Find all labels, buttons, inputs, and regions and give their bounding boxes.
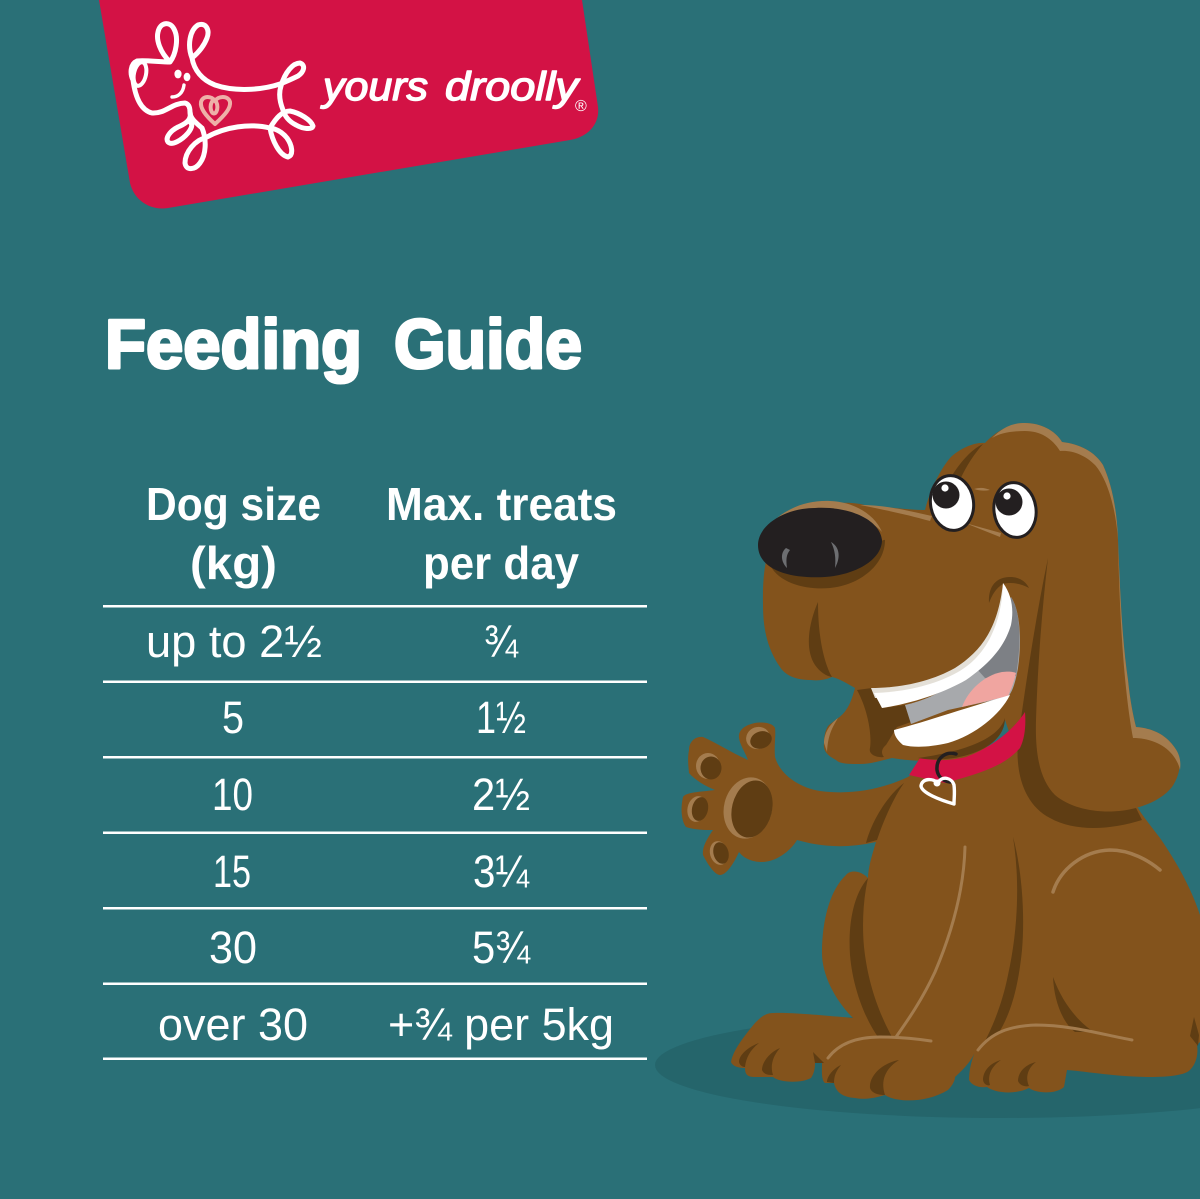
icon: logo heart: [201, 97, 230, 124]
table header: dog size: [146, 478, 321, 589]
heart tag on collar: [921, 753, 956, 804]
tail tip shade: [1190, 1017, 1199, 1046]
row: 5: 5: [222, 692, 244, 743]
logo wordmark: droolly: [445, 65, 581, 109]
body shading: [739, 783, 1094, 1095]
row: up to 2½: up to 2½: [146, 616, 322, 667]
row: 15: [213, 846, 530, 897]
row: 30: 30: [209, 922, 257, 973]
upper teeth: [871, 583, 1012, 708]
illustration: cartoon dog: [682, 423, 1200, 1100]
table header: max treats: per day: [423, 537, 579, 589]
table header: max treats: [386, 478, 617, 589]
row: up to 2½: ¾: [484, 616, 519, 667]
row: 10: [212, 769, 530, 820]
table header: max treats: Max. treats: [386, 478, 617, 530]
feeding table: [103, 478, 647, 1060]
left eye: [927, 473, 977, 533]
collar: [909, 712, 1025, 783]
nose: [758, 508, 882, 577]
dog body and waving paw: [682, 723, 1200, 1100]
row: 10: 10: [212, 769, 253, 820]
icon: logo dog eyes: [174, 70, 190, 81]
ground shadow: [655, 1012, 1200, 1118]
row: over 30: [158, 999, 614, 1050]
logo wordmark: yours: [320, 65, 428, 109]
paw pads: [685, 724, 779, 867]
head shading: [770, 444, 1142, 828]
row: 15: 3¼: [473, 846, 530, 897]
title: [105, 305, 582, 383]
panel: brand logo tab: [99, 0, 598, 208]
row: up to 2½: [146, 616, 519, 667]
right eye: [990, 480, 1040, 540]
row: over 30: over 30: [158, 999, 308, 1050]
logo wordmark: [320, 65, 581, 109]
head highlights: [766, 423, 1180, 770]
icon: looping line dog logo: [131, 24, 313, 169]
table header: dog size: Dog size: [146, 478, 321, 530]
mouth interior: [905, 597, 1020, 724]
table rules: [103, 605, 647, 1060]
row: over 30: +¾ per 5kg: [388, 999, 614, 1050]
chin fold shadow: [918, 718, 1005, 759]
title: Feeding: [105, 305, 362, 383]
row: 5: [222, 692, 526, 743]
row: 30: 5¾: [472, 922, 531, 973]
head: [763, 423, 1180, 828]
body highlights: [828, 847, 1160, 1058]
row: 30: [209, 922, 531, 973]
table header: dog size: (kg): [190, 537, 277, 589]
row: 15: 15: [213, 846, 251, 897]
lower teeth: [894, 695, 1010, 747]
row: 10: 2½: [472, 769, 530, 820]
title: Guide: [394, 305, 582, 383]
registered mark: ®: [575, 98, 587, 115]
row: 5: 1½: [476, 692, 526, 743]
